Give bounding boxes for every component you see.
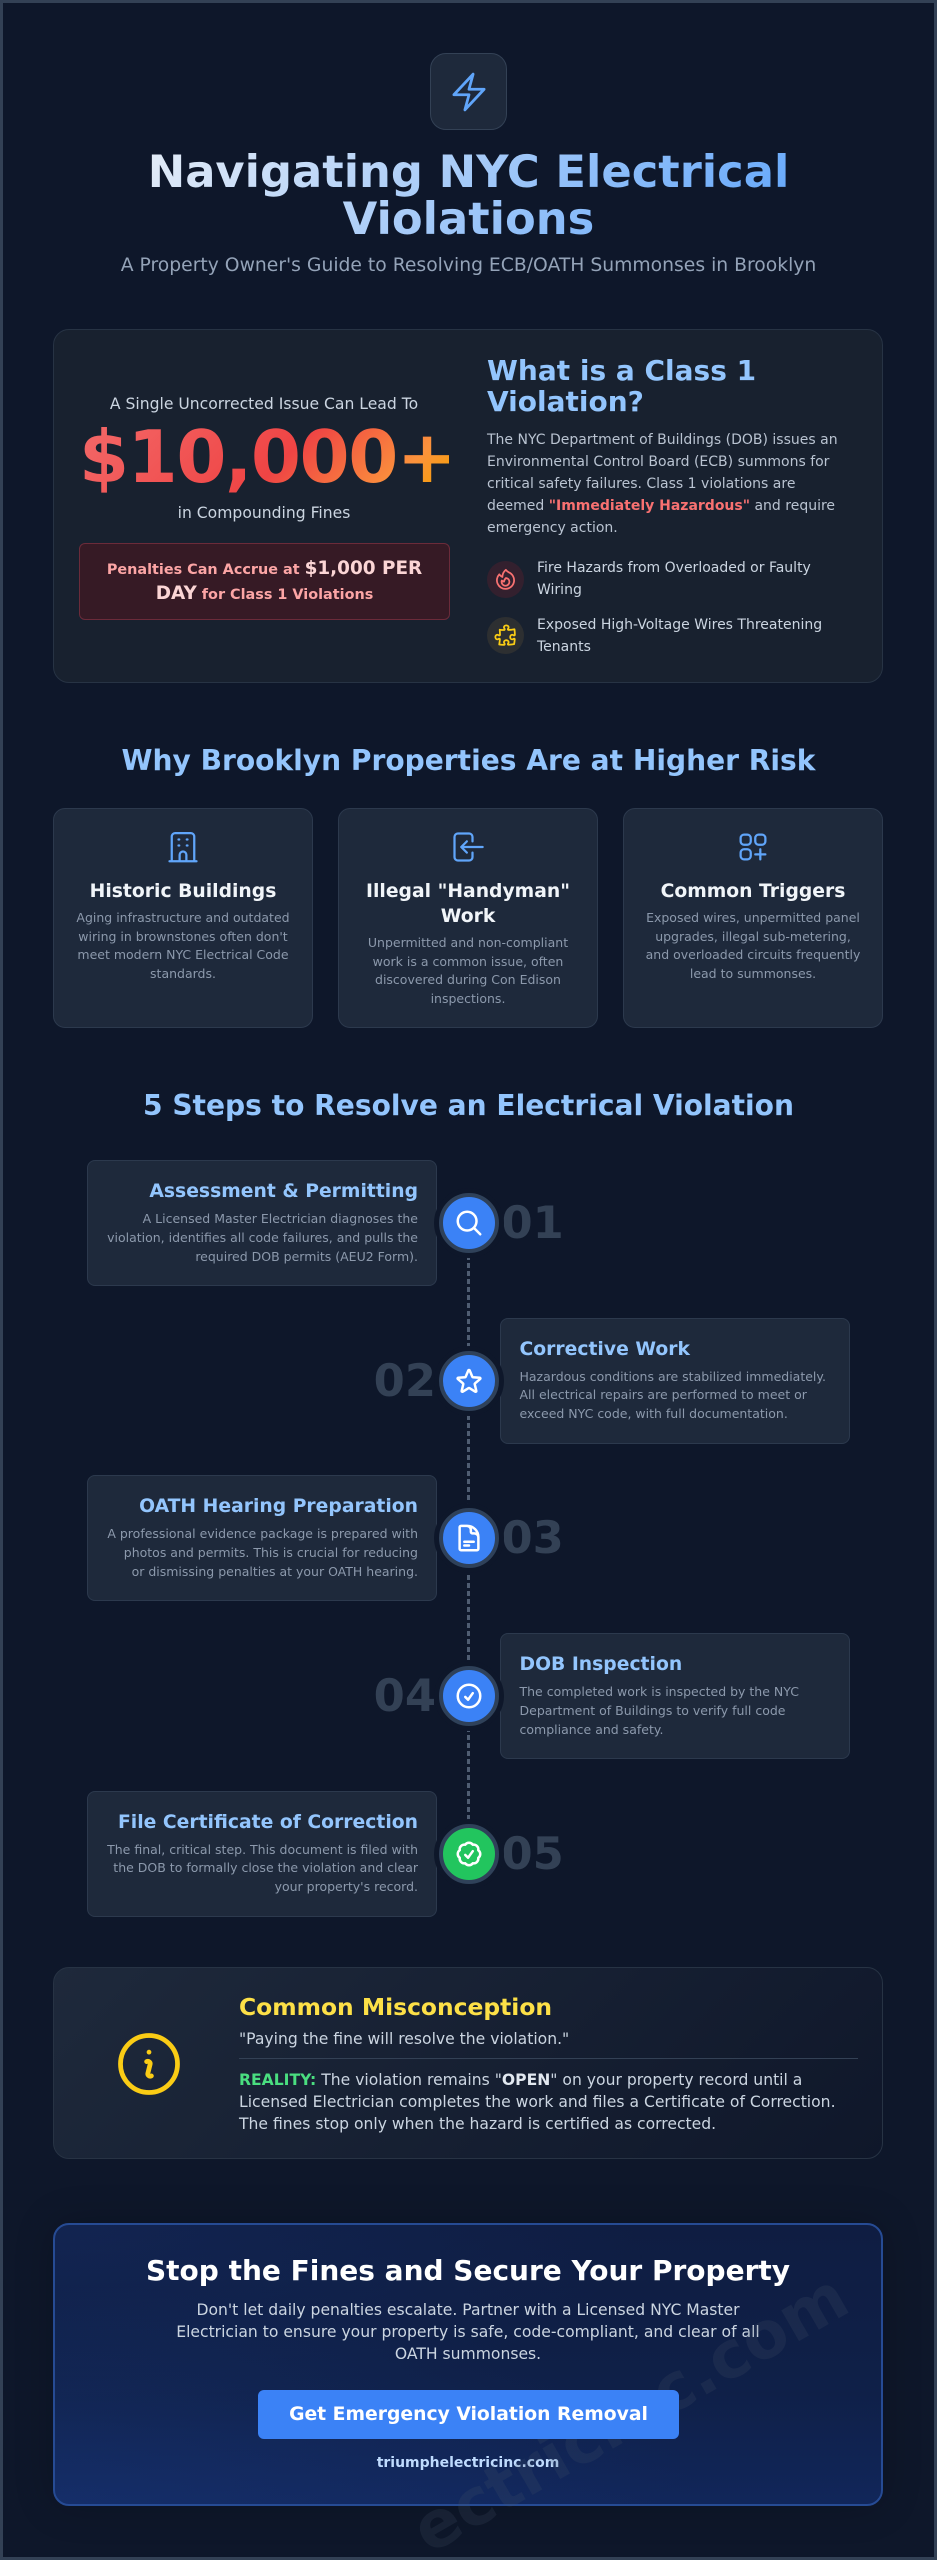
step description: The completed work is inspected by the NYC (520, 1684, 799, 1699)
step description: The final, critical step. This document is filed with (107, 1842, 418, 1856)
heading: what is a class 1 violation: What is a Class 1 (487, 354, 756, 386)
step description (519, 1684, 799, 1737)
step title: DOB Inspection (520, 1654, 682, 1675)
exposed wires text: Exposed High-Voltage Wires Threatening (537, 616, 822, 632)
step title: OATH Hearing Preparation (139, 1496, 418, 1517)
icon: fire hazard (487, 561, 524, 598)
class 1 description: deemed "Immediately Hazardous" and require (487, 498, 835, 514)
card description: lead to summonses. (690, 966, 816, 981)
step 1 card (87, 1160, 437, 1286)
step description: violation, identifies all code failures, and pulls the (107, 1230, 418, 1245)
reality text (238, 2071, 836, 2133)
step description: your property's record. (275, 1879, 418, 1894)
cta text: Electrician to ensure your property is safe, code-compliant, and clear of all (176, 2323, 760, 2341)
fines lead-in: A Single Uncorrected Issue Can Lead To (110, 395, 418, 413)
title: Navigating NYC Electrical (148, 145, 789, 198)
step description: Hazardous conditions are stabilized immediately. (520, 1368, 826, 1384)
step 4 card (500, 1633, 850, 1759)
title (3, 148, 934, 242)
misconception title: Common Misconception (239, 1993, 552, 2021)
cta button: Get Emergency Violation Removal (289, 2404, 648, 2425)
step description: or dismissing penalties at your OATH hearing. (132, 1564, 418, 1579)
step description: exceed NYC code, with full documentation. (520, 1406, 788, 1421)
big number: $10,000+: $10,000+ (79, 415, 456, 499)
class 1 description: emergency action. (487, 520, 618, 536)
fire hazard text: Fire Hazards from Overloaded or Faulty (537, 560, 811, 576)
title: Violations (343, 192, 594, 245)
cta text (176, 2301, 760, 2363)
step title: Corrective Work (520, 1338, 690, 1360)
reality text: Licensed Electrician completes the work and files a Certificate of Correction. (239, 2093, 836, 2111)
cta button (258, 2390, 679, 2439)
class 1 description (486, 432, 838, 536)
heading: what is a class 1 violation: Violation? (487, 384, 644, 418)
panel: common misconception (53, 1967, 883, 2159)
step description (520, 1368, 826, 1421)
card description: and overloaded circuits frequently (646, 947, 860, 962)
card title: Common Triggers (661, 880, 845, 902)
card description: discovered during Con Edison (375, 972, 561, 987)
card description: Exposed wires, unpermitted panel (646, 910, 860, 925)
panel: common triggers (623, 808, 883, 1028)
step 5 node: check badge icon (438, 1824, 498, 1884)
divider (239, 2058, 858, 2059)
fire hazard text (537, 560, 811, 598)
icon: info (118, 2033, 180, 2095)
class 1 description: critical safety failures. Class 1 violations are (487, 476, 795, 492)
reality text: REALITY: The violation remains "OPEN" on your property record until a (239, 2071, 802, 2089)
card description (646, 910, 860, 981)
step 4 node: check circle icon (438, 1666, 498, 1726)
step title: Assessment & Permitting (149, 1181, 418, 1202)
cta text: Don't let daily penalties escalate. Partner with a Licensed NYC Master (196, 2301, 740, 2319)
step description: the DOB to formally close the violation and clear (113, 1860, 418, 1875)
card description: wiring in brownstones often don't (78, 929, 288, 944)
step description: Department of Buildings to verify full code (520, 1703, 786, 1718)
subtitle: A Property Owner's Guide to Resolving ECB/OATH Summonses in Brooklyn (121, 255, 816, 276)
step 3 number: 03 (502, 1511, 564, 1564)
heading: why brooklyn: Why Brooklyn Properties Are at Higher Risk (122, 744, 815, 777)
card description: work is a common issue, often (373, 954, 563, 969)
reality text: The fines stop only when the hazard is certified as corrected. (239, 2115, 716, 2133)
step 3 card (87, 1475, 437, 1601)
step description (107, 1526, 418, 1579)
cta text: OATH summonses. (395, 2345, 541, 2363)
panel: call to action (53, 2223, 883, 2506)
heading: five steps: 5 Steps to Resolve an Electrical Violation (143, 1089, 794, 1122)
fines follow-up: in Compounding Fines (178, 504, 350, 522)
timeline dashed line (467, 1223, 470, 1853)
panel: illegal handyman work (338, 808, 598, 1028)
card description: inspections. (431, 991, 505, 1006)
panel: fines and class 1 definition (53, 329, 883, 683)
card title: Work (441, 906, 495, 927)
fire hazard text: Wiring (537, 582, 582, 598)
heading: what is a class 1 violation (487, 354, 756, 418)
card title (366, 880, 570, 927)
icon: entry arrow (453, 832, 484, 862)
step 5 card (87, 1790, 437, 1916)
step description: A professional evidence package is prepared with (107, 1526, 418, 1541)
class 1 description: Environmental Control Board (ECB) summons for (487, 454, 829, 470)
class 1 description: The NYC Department of Buildings (DOB) issues an (487, 432, 838, 448)
card description: Unpermitted and non-compliant (368, 935, 568, 950)
penalty callout: Penalties Can Accrue at $1,000 PER (107, 558, 422, 579)
step description: compliance and safety. (520, 1722, 663, 1737)
panel: historic buildings (53, 808, 313, 1028)
card description: meet modern NYC Electrical Code (77, 947, 289, 962)
card description (76, 910, 290, 981)
step description: photos and permits. This is crucial for reducing (124, 1545, 418, 1560)
header icon: lightning bolt (430, 53, 507, 130)
card title: Historic Buildings (90, 880, 276, 902)
card description (368, 935, 568, 1006)
website: triumphelectricinc.com (377, 2455, 559, 2471)
penalty callout (79, 543, 450, 620)
icon: exposed wires (487, 617, 524, 654)
step description (107, 1211, 418, 1264)
icon: building (168, 832, 198, 862)
watermark: ectricinc.com (400, 2259, 861, 2560)
misconception quote: "Paying the fine will resolve the violation." (239, 2030, 569, 2048)
step 4 number: 04 (374, 1669, 436, 1722)
card description: upgrades, illegal sub-metering, (655, 929, 851, 944)
step 2 number: 02 (374, 1354, 436, 1406)
exposed wires text: Tenants (537, 638, 591, 654)
step 2 card (500, 1318, 850, 1444)
step 2 node: star icon (438, 1350, 498, 1410)
step description (107, 1842, 418, 1894)
card description: Aging infrastructure and outdated (76, 910, 290, 925)
exposed wires text (536, 616, 822, 654)
step description: All electrical repairs are performed to meet or (520, 1387, 807, 1402)
card title: Illegal "Handyman" (366, 880, 570, 902)
step description: required DOB permits (AEU2 Form). (195, 1249, 418, 1264)
step 5 number: 05 (502, 1826, 564, 1880)
step description: A Licensed Master Electrician diagnoses the (143, 1211, 418, 1226)
step title: File Certificate of Correction (118, 1812, 418, 1832)
icon: squares plus (740, 834, 766, 860)
step 1 node: search icon (438, 1193, 498, 1253)
penalty callout: DAY for Class 1 Violations (156, 583, 373, 604)
step 1 number: 01 (502, 1196, 564, 1249)
cta title: Stop the Fines and Secure Your Property (146, 2254, 790, 2287)
step 3 node: document icon (438, 1508, 498, 1568)
card description: standards. (150, 966, 216, 981)
